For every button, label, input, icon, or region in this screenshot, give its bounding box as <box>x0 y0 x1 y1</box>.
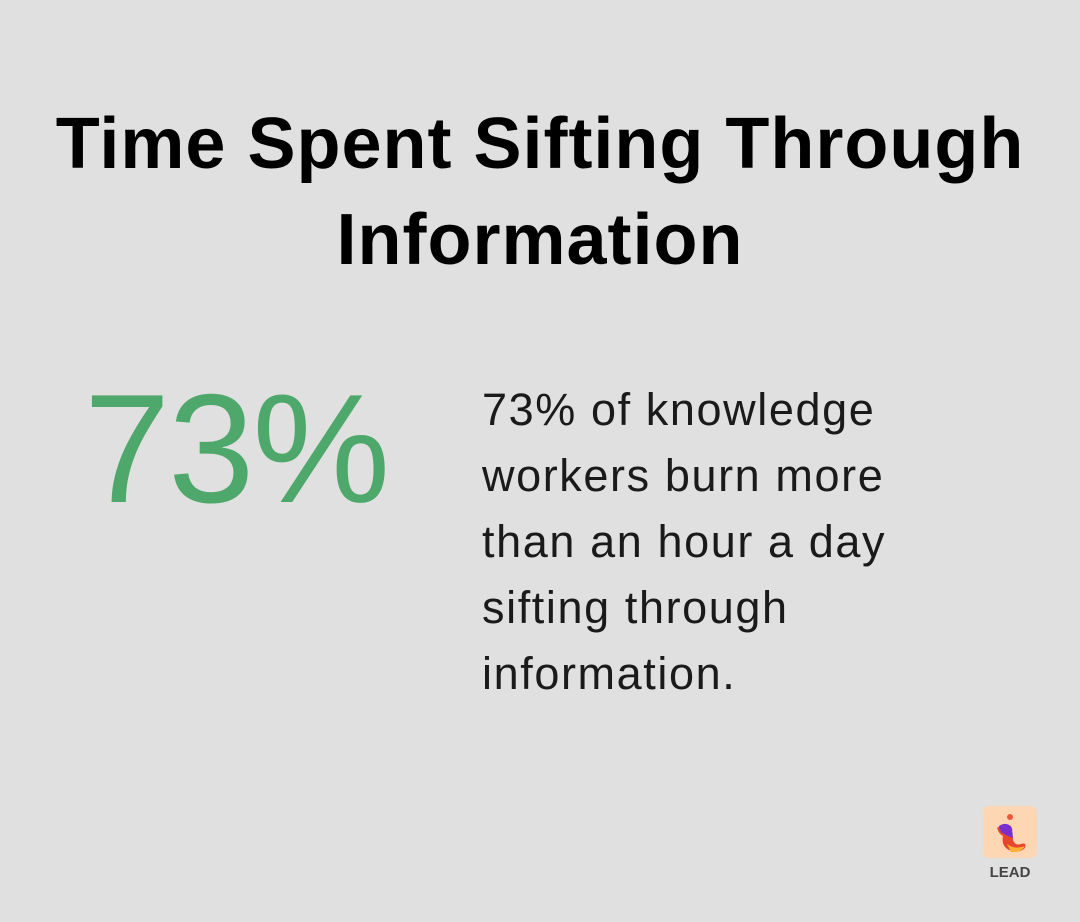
big stat: 73% <box>84 362 388 535</box>
description text: sifting through <box>482 582 789 633</box>
description text: workers burn more <box>482 450 884 501</box>
title <box>56 104 1024 280</box>
description text: information. <box>482 648 736 699</box>
description text: 73% of knowledge <box>482 384 875 435</box>
logo: LEAD <box>983 806 1037 880</box>
description text: than an hour a day <box>482 516 886 567</box>
title: Information <box>337 200 743 280</box>
description text <box>482 384 886 699</box>
title: Time Spent Sifting Through <box>56 104 1024 184</box>
